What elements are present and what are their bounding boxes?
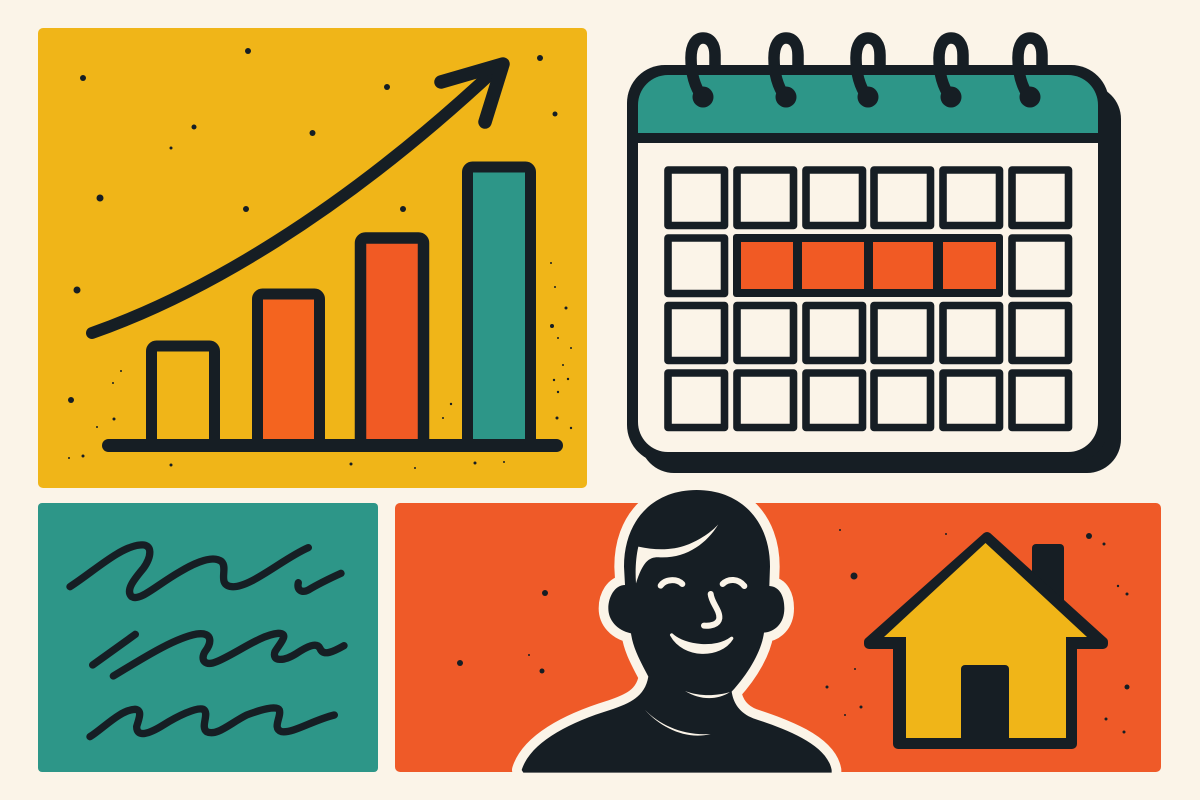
highlighted week — [733, 234, 1003, 297]
neck line — [645, 710, 711, 736]
teal panel background — [38, 503, 378, 772]
chimney — [1032, 544, 1064, 604]
growth arrow — [92, 64, 503, 333]
icon: smiling person — [522, 490, 832, 773]
handwritten squiggles — [70, 545, 344, 737]
orange panel background — [395, 503, 1161, 772]
icon: house — [869, 537, 1103, 745]
panel: person and home — [395, 490, 1161, 773]
person silhouette with cream outline — [522, 490, 832, 773]
calendar day grid — [668, 170, 1068, 428]
panel: rising bar chart — [38, 28, 587, 488]
calendar page — [638, 143, 1098, 452]
chin line — [685, 691, 730, 698]
smile — [672, 635, 732, 652]
calendar drop shadow — [640, 85, 1121, 473]
calendar teal header — [638, 75, 1098, 133]
house outline — [869, 537, 1103, 744]
bar 4 — [468, 167, 530, 446]
house body — [884, 543, 1087, 738]
bar 3 — [360, 238, 424, 446]
face features — [661, 580, 744, 626]
bar 1 — [152, 346, 214, 446]
panel speckles — [68, 48, 572, 469]
binder rings — [691, 38, 1042, 97]
binder ring ends — [692, 86, 1040, 108]
house door — [961, 665, 1009, 745]
hair highlight — [636, 524, 718, 583]
panel: scribbled notes — [38, 503, 378, 772]
bar 2 — [258, 294, 320, 446]
yellow panel background — [38, 28, 587, 488]
calendar icon — [627, 38, 1121, 473]
calendar frame — [627, 65, 1109, 463]
panel speckles — [457, 529, 1130, 734]
chart baseline — [108, 439, 556, 452]
